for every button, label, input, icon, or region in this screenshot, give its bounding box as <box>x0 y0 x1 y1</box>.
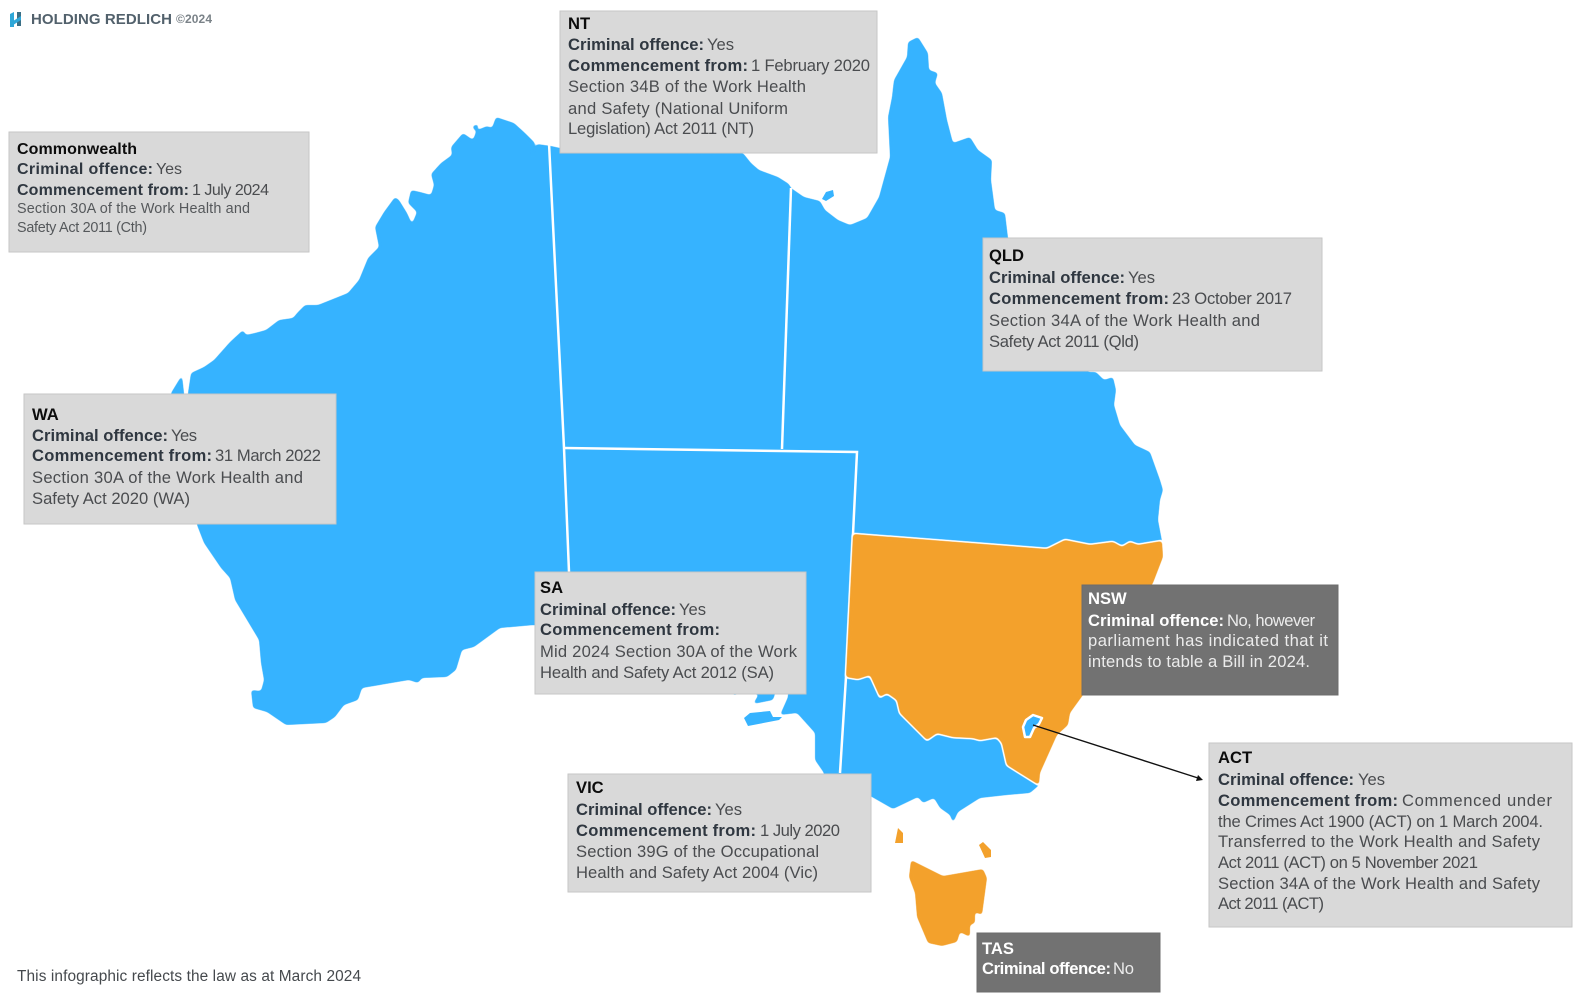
region: Kangaroo Island <box>744 711 782 726</box>
commencement date: Commencement from: <box>17 182 189 199</box>
legislation: Section 30A of the Work Health and <box>32 468 303 487</box>
criminal offence status: Criminal offence: <box>540 600 676 619</box>
legislation: Safety Act 2011 (Qld) <box>989 332 1139 351</box>
commencement date: Commencement from: <box>568 56 748 75</box>
criminal offence status: Yes <box>679 600 706 619</box>
panel: ACT <box>1209 743 1572 927</box>
criminal offence status: Criminal offence: <box>1218 770 1354 789</box>
criminal offence status: No <box>1113 959 1134 978</box>
legislation history: Transferred to the Work Health and Safety <box>1218 832 1541 851</box>
panel: NSW <box>1082 585 1338 695</box>
commencement date <box>32 446 321 465</box>
commencement date <box>989 289 1292 308</box>
region: New South Wales orange <box>846 534 1163 785</box>
region: King Island <box>895 828 903 843</box>
heading: VIC <box>576 778 604 797</box>
commencement date: Commencement from: <box>32 446 212 465</box>
commencement date: 23 October 2017 <box>1172 289 1292 308</box>
criminal offence status <box>1088 611 1315 630</box>
explanation <box>1088 631 1328 671</box>
legislation: Section 30A of the Work Health and <box>17 201 250 217</box>
legislation: Safety Act 2011 (Cth) <box>17 220 147 236</box>
legislation history: Section 34A of the Work Health and Safety <box>1218 874 1541 893</box>
icon: logo mark <box>10 12 21 27</box>
region: mainland blue states <box>171 37 1163 823</box>
legislation history: Act 2011 (ACT) <box>1218 894 1324 913</box>
legislation: Legislation) Act 2011 (NT) <box>568 119 754 138</box>
heading: SA <box>540 578 563 597</box>
panel: QLD <box>983 238 1322 371</box>
legislation: Section 34B of the Work Health <box>568 77 806 96</box>
commencement date: 1 July 2020 <box>760 821 840 840</box>
region: Groote Eylandt island <box>822 190 834 201</box>
criminal offence status: Criminal offence: <box>576 800 712 819</box>
legislation history: Act 2011 (ACT) on 5 November 2021 <box>1218 853 1478 872</box>
heading: Commonwealth <box>17 141 137 158</box>
heading: TAS <box>982 939 1014 958</box>
heading: WA <box>32 405 59 424</box>
region: New South Wales outline <box>846 534 1163 785</box>
region: Tasmania orange <box>909 860 987 946</box>
criminal offence status: No, however <box>1227 611 1315 630</box>
legislation <box>568 77 806 138</box>
criminal offence status: Yes <box>1128 268 1155 287</box>
criminal offence status: Yes <box>707 35 734 54</box>
commencement date <box>576 821 840 840</box>
heading: ACT <box>1218 748 1252 767</box>
legislation <box>576 842 819 882</box>
panel: VIC <box>568 774 871 892</box>
criminal offence status: Yes <box>156 161 182 178</box>
commencement date <box>568 56 870 75</box>
legislation: Mid 2024 Section 30A of the Work <box>540 642 798 661</box>
footnote: This infographic reflects the law as at March 2024 <box>17 968 361 985</box>
map of Australia <box>171 37 1163 946</box>
commencement date: 1 July 2024 <box>192 182 269 199</box>
commencement date: 1 February 2020 <box>751 56 870 75</box>
explanation: parliament has indicated that it <box>1088 631 1328 650</box>
legislation <box>17 201 250 236</box>
heading: NT <box>568 14 590 33</box>
commencement date <box>1218 791 1552 810</box>
state borders <box>549 143 857 773</box>
legislation: Section 39G of the Occupational <box>576 842 819 861</box>
brand name: HOLDING REDLICH <box>31 11 172 28</box>
panel: NT <box>560 11 877 153</box>
commencement date: 31 March 2022 <box>215 446 321 465</box>
commencement date: Commencement from: <box>576 821 756 840</box>
legislation: and Safety (National Uniform <box>568 99 788 118</box>
logo: Holding Redlich <box>10 11 212 28</box>
panel: TAS <box>977 933 1160 992</box>
criminal offence status: Criminal offence: <box>1088 611 1224 630</box>
criminal offence status: Criminal offence: <box>989 268 1125 287</box>
copyright: ©2024 <box>176 12 212 26</box>
legislation history: the Crimes Act 1900 (ACT) on 1 March 2004. <box>1218 812 1543 831</box>
commencement date: Commencement from: <box>1218 791 1398 810</box>
criminal offence status: Criminal offence: <box>17 161 153 178</box>
legislation: Safety Act 2020 (WA) <box>32 489 190 508</box>
region: Flinders Island <box>979 842 991 858</box>
commencement date: Commenced under <box>1402 791 1552 810</box>
legislation <box>540 642 798 682</box>
legislation <box>989 311 1260 351</box>
region: ACT blue <box>1023 715 1042 737</box>
panel: SA <box>535 572 806 694</box>
legislation: Section 34A of the Work Health and <box>989 311 1260 330</box>
explanation: intends to table a Bill in 2024. <box>1088 652 1310 671</box>
heading: NSW <box>1088 589 1127 608</box>
commencement date: Commencement from: <box>989 289 1169 308</box>
panel: Commonwealth <box>9 132 309 252</box>
commencement date <box>17 182 269 199</box>
legislation <box>32 468 303 508</box>
legislation: Health and Safety Act 2012 (SA) <box>540 663 774 682</box>
arrow: ACT callout pointer <box>1033 725 1203 781</box>
criminal offence status: Criminal offence: <box>982 959 1111 978</box>
criminal offence status: Yes <box>1358 770 1385 789</box>
criminal offence status: Yes <box>715 800 742 819</box>
legislation: Health and Safety Act 2004 (Vic) <box>576 863 818 882</box>
heading: QLD <box>989 246 1024 265</box>
commencement date: Commencement from: <box>540 620 720 639</box>
panel: WA <box>24 394 336 524</box>
legislation history <box>1218 812 1543 913</box>
criminal offence status: Yes <box>171 426 197 445</box>
criminal offence status: Criminal offence: <box>568 35 704 54</box>
criminal offence status: Criminal offence: <box>32 426 168 445</box>
